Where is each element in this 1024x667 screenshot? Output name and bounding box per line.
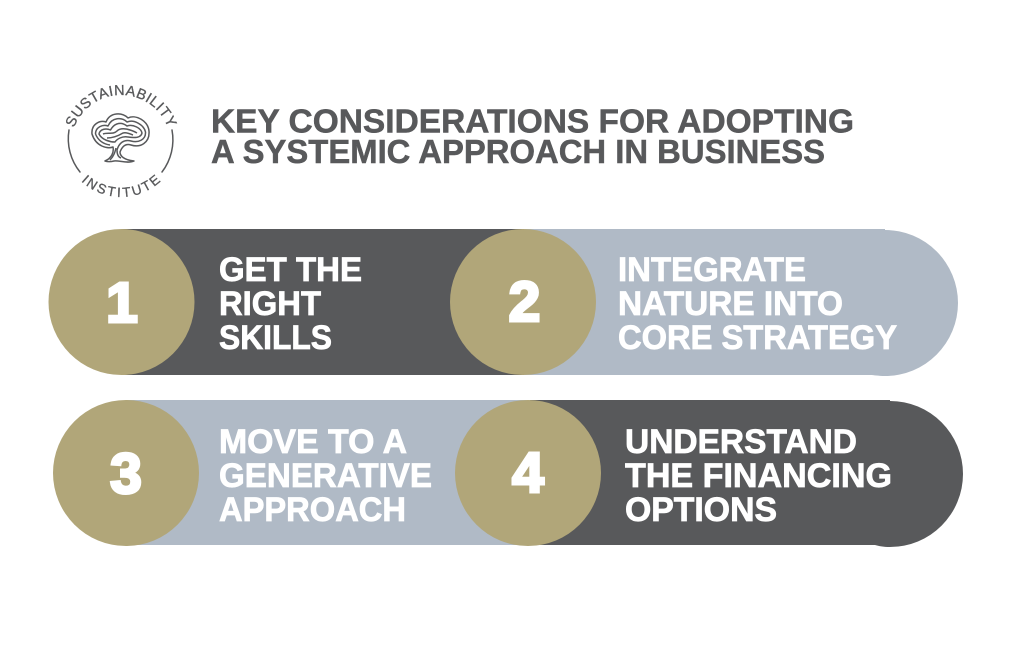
step 2 text: NATURE INTO (618, 285, 843, 323)
step 1 text: SKILLS (219, 319, 332, 357)
step 2 number circle (450, 229, 596, 375)
row 2 light bar with step 3 (126, 400, 530, 545)
step 1 text: RIGHT (219, 285, 321, 323)
step 4 text: THE FINANCING (625, 457, 892, 495)
logo tree icon (92, 114, 149, 162)
step 4 text (625, 423, 892, 529)
step 3 text (219, 423, 432, 529)
title: KEY CONSIDERATIONS FOR ADOPTING (211, 102, 854, 140)
step 2 text: INTEGRATE (618, 251, 806, 289)
step 2 text: CORE STRATEGY (618, 319, 897, 357)
logo text: INSTITUTE (82, 174, 161, 198)
title (211, 102, 854, 170)
row 1 dark bar with step 1 (122, 229, 524, 375)
step 2 number circle: 2 (509, 270, 540, 334)
row 1 light bar with step 2 (523, 229, 958, 376)
logo text (66, 84, 178, 198)
step 4 number circle: 4 (512, 441, 544, 505)
row 2 dark bar with step 4 (528, 400, 963, 547)
step 4 number circle (455, 400, 601, 546)
step 1 text: GET THE (219, 251, 362, 289)
step 1 number circle: 1 (106, 271, 138, 335)
step 1 text (219, 251, 362, 357)
step 3 text: MOVE TO A (219, 423, 407, 461)
step 4 text: UNDERSTAND (625, 423, 857, 461)
title: A SYSTEMIC APPROACH IN BUSINESS (211, 133, 825, 170)
step 3 text: GENERATIVE (219, 457, 432, 495)
step 2 text (618, 251, 897, 357)
step 4 text: OPTIONS (625, 491, 777, 529)
logo text: SUSTAINABILITY (66, 84, 178, 126)
step 3 text: APPROACH (219, 491, 406, 529)
step 3 number circle (53, 400, 199, 546)
logo ring arcs (68, 130, 173, 172)
step 1 number circle (48, 229, 194, 375)
logo: Sustainability Institute (66, 84, 178, 198)
step 3 number circle: 3 (110, 442, 142, 506)
